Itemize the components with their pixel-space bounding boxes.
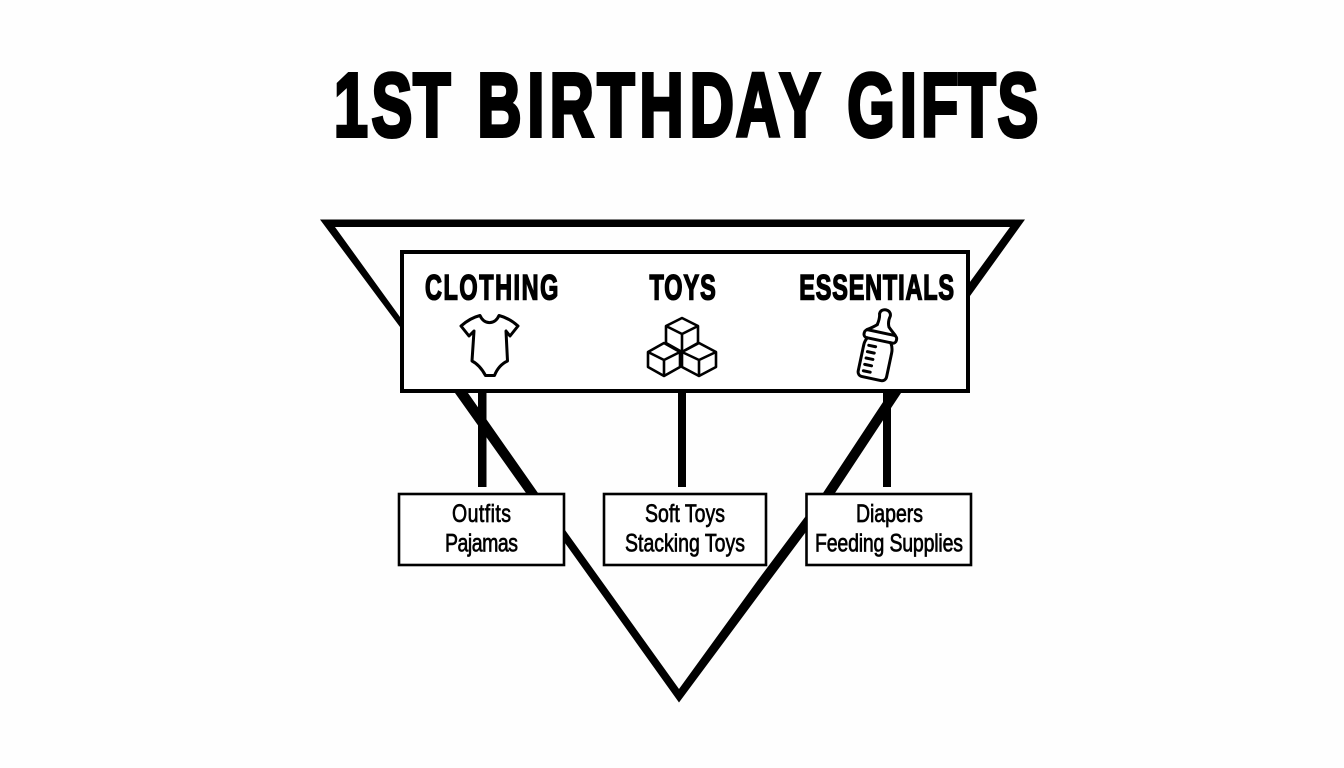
text: stacking toys: Stacking Toys (625, 529, 745, 557)
heading: clothing: CLOTHING (425, 269, 558, 308)
text: diapers: Diapers (856, 500, 923, 528)
connector: essentials (883, 392, 891, 487)
text: feeding supplies: Feeding Supplies (815, 529, 963, 557)
heading: essentials: ESSENTIALS (799, 269, 954, 308)
icon: baby onesie (461, 316, 518, 376)
title: 1ST BIRTHDAY GIFTS (334, 55, 1038, 156)
text: soft toys: Soft Toys (645, 500, 725, 528)
inverted triangle frame (320, 220, 1025, 702)
connector: toys (678, 392, 686, 487)
panel: toys items (604, 494, 766, 565)
panel: categories (402, 252, 968, 391)
heading: toys: TOYS (649, 269, 716, 308)
text: outfits: Outfits (452, 500, 511, 528)
panel: clothing items (399, 494, 564, 565)
connector: clothing (478, 392, 486, 487)
text: pajamas: Pajamas (445, 529, 518, 557)
icon: baby bottle (855, 306, 902, 382)
icon: stacking blocks (648, 318, 716, 376)
panel: essentials items (806, 494, 971, 565)
